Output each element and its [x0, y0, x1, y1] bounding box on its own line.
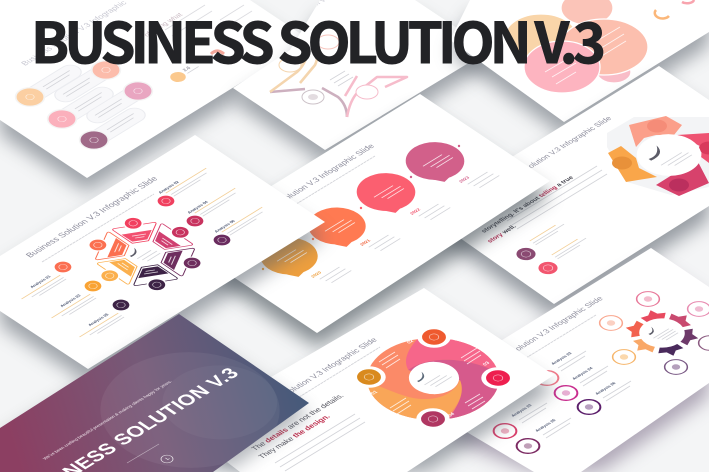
- analysis labels: Analysis 03: [550, 351, 573, 366]
- cycle blade dark: [128, 263, 181, 294]
- slide: top centre star diagram: [233, 0, 490, 164]
- body lines: [507, 166, 607, 229]
- pink arc: [211, 51, 224, 54]
- cover tagline: We've been crafting beautiful presentation & making clients happy for years.: [42, 379, 173, 461]
- timeline dots: [262, 145, 460, 270]
- paragraph lines: [275, 414, 365, 471]
- slide heading: Solution V.3 Infographic Slide: [508, 295, 606, 355]
- analysis labels: Analysis 04: [571, 366, 594, 381]
- analysis 03: [41, 278, 110, 322]
- cycle blade magenta: [143, 217, 203, 256]
- slide heading: Business Solution V.3 Infographic Slide: [23, 175, 160, 259]
- cycle blade red: [109, 214, 162, 245]
- bubble 2022: [356, 173, 416, 213]
- statement text: The details are not the details.: [249, 392, 346, 452]
- pill row 1: [15, 64, 82, 106]
- heading sub line: [42, 194, 154, 262]
- swirl numbers: 01: [370, 390, 380, 396]
- slide heading: Solution V.3 Infographic Slide: [277, 142, 377, 204]
- analysis 01: Analysis 01: [29, 274, 52, 289]
- analysis 05: [69, 297, 138, 341]
- row icon 2: [538, 238, 586, 274]
- star nodes: [279, 35, 378, 104]
- cycle blade plum: [157, 244, 208, 279]
- pill row 3: [79, 108, 146, 150]
- cycle centre: [126, 242, 160, 264]
- year 2023: 2023: [458, 175, 471, 184]
- slide: bottom right icon rings: [410, 248, 709, 472]
- analysis rows: [489, 368, 605, 456]
- pill row 2: [47, 86, 114, 128]
- cover decorative circles: [63, 328, 317, 472]
- small stat icon: 2.6: [182, 66, 193, 73]
- heading sub line: [296, 347, 380, 399]
- swirl numbers: 02: [406, 339, 416, 345]
- statement text line 2: They make the design.: [256, 413, 332, 460]
- heading sub line: [526, 315, 596, 358]
- analysis 04: Analysis 04: [186, 200, 210, 214]
- slide: right storytelling with segmented ring: [423, 66, 709, 318]
- slide heading: Solution V.3 Infographic Slide: [281, 336, 380, 397]
- cycle blade salmon: [82, 229, 133, 264]
- cycle diagram: [59, 199, 231, 309]
- cover scroll icon: [159, 454, 175, 464]
- cover sub line: [127, 444, 159, 463]
- bubble 2023: [394, 134, 477, 188]
- circle text lines: [545, 27, 626, 84]
- swirl magenta: [408, 360, 510, 425]
- pill row 4: [54, 60, 121, 102]
- slide: centre speech bubble timeline: [181, 94, 550, 347]
- spiked ring: [608, 298, 709, 368]
- segment peach: [629, 116, 682, 147]
- analysis 06: Analysis 06: [213, 219, 237, 233]
- centre circle: [637, 134, 702, 176]
- slide heading: Solution V.3 Infographic Slide: [521, 115, 614, 172]
- swirl numbers: 03: [482, 361, 492, 367]
- row icon 1: [516, 224, 564, 260]
- analysis 02: [148, 165, 218, 209]
- year 2020: [310, 260, 351, 286]
- swirl chart: [360, 325, 510, 435]
- swirl centre: [399, 355, 469, 401]
- segment orange: [608, 146, 657, 182]
- year 2021: 2021: [359, 238, 372, 247]
- slide: top right overlapping circles: [450, 0, 709, 136]
- statement text: storytelling. It's about telling a true: [480, 175, 576, 234]
- slide: bottom centre swirl diagram: [180, 288, 554, 472]
- year 2022: 2022: [409, 207, 422, 216]
- segment nodes: [612, 120, 709, 192]
- slide: cover: [0, 314, 317, 472]
- analysis 01: [11, 259, 80, 303]
- analysis labels: Analysis 02: [510, 403, 533, 418]
- statement text line 2: story well.: [486, 224, 518, 244]
- main title: BUSINESS SOLUTION V.3: [31, 0, 606, 80]
- hexagon backdrop: [607, 117, 709, 195]
- band text: [379, 348, 485, 414]
- segment magenta: [656, 160, 709, 196]
- cycle blade orange: [87, 252, 147, 291]
- text lines: [330, 71, 353, 86]
- swirl nodes: [345, 322, 522, 434]
- slide heading: Business Solution V.3 Infographic: [19, 0, 129, 67]
- star outline: [269, 58, 408, 118]
- slide: left cycle diagram: [0, 135, 325, 383]
- swirl pink: [406, 325, 510, 373]
- analysis 03: Analysis 03: [59, 293, 82, 308]
- analysis labels: Analysis 05: [534, 418, 557, 433]
- analysis 06: [204, 204, 274, 248]
- analysis labels: Analysis 06: [594, 381, 617, 396]
- segment red: [677, 133, 709, 163]
- swirl numbers: [370, 339, 492, 418]
- pill row 5: [86, 82, 153, 124]
- mini gauges: [655, 10, 669, 19]
- venn circles: [505, 0, 648, 93]
- analysis 02: Analysis 02: [157, 180, 181, 194]
- year 2020: 2020: [310, 270, 323, 279]
- small stat icon: [170, 66, 199, 82]
- swirl numbers: 04: [447, 412, 457, 418]
- analysis 04: [177, 185, 247, 229]
- outline icons around ring: [595, 289, 709, 377]
- swirl orange: [360, 380, 462, 435]
- bubble 2021: [310, 208, 366, 247]
- heading sub line: [293, 156, 375, 206]
- slide: top left pill list: [0, 0, 310, 192]
- text lines: [165, 5, 252, 36]
- analysis 05: Analysis 05: [87, 312, 110, 327]
- year 2023: [458, 165, 499, 191]
- year 2022: [409, 197, 450, 223]
- analysis labels: [510, 351, 631, 438]
- quote text: of doing what: [143, 12, 184, 38]
- bubble 2020: [262, 238, 318, 277]
- year 2021: [359, 228, 400, 254]
